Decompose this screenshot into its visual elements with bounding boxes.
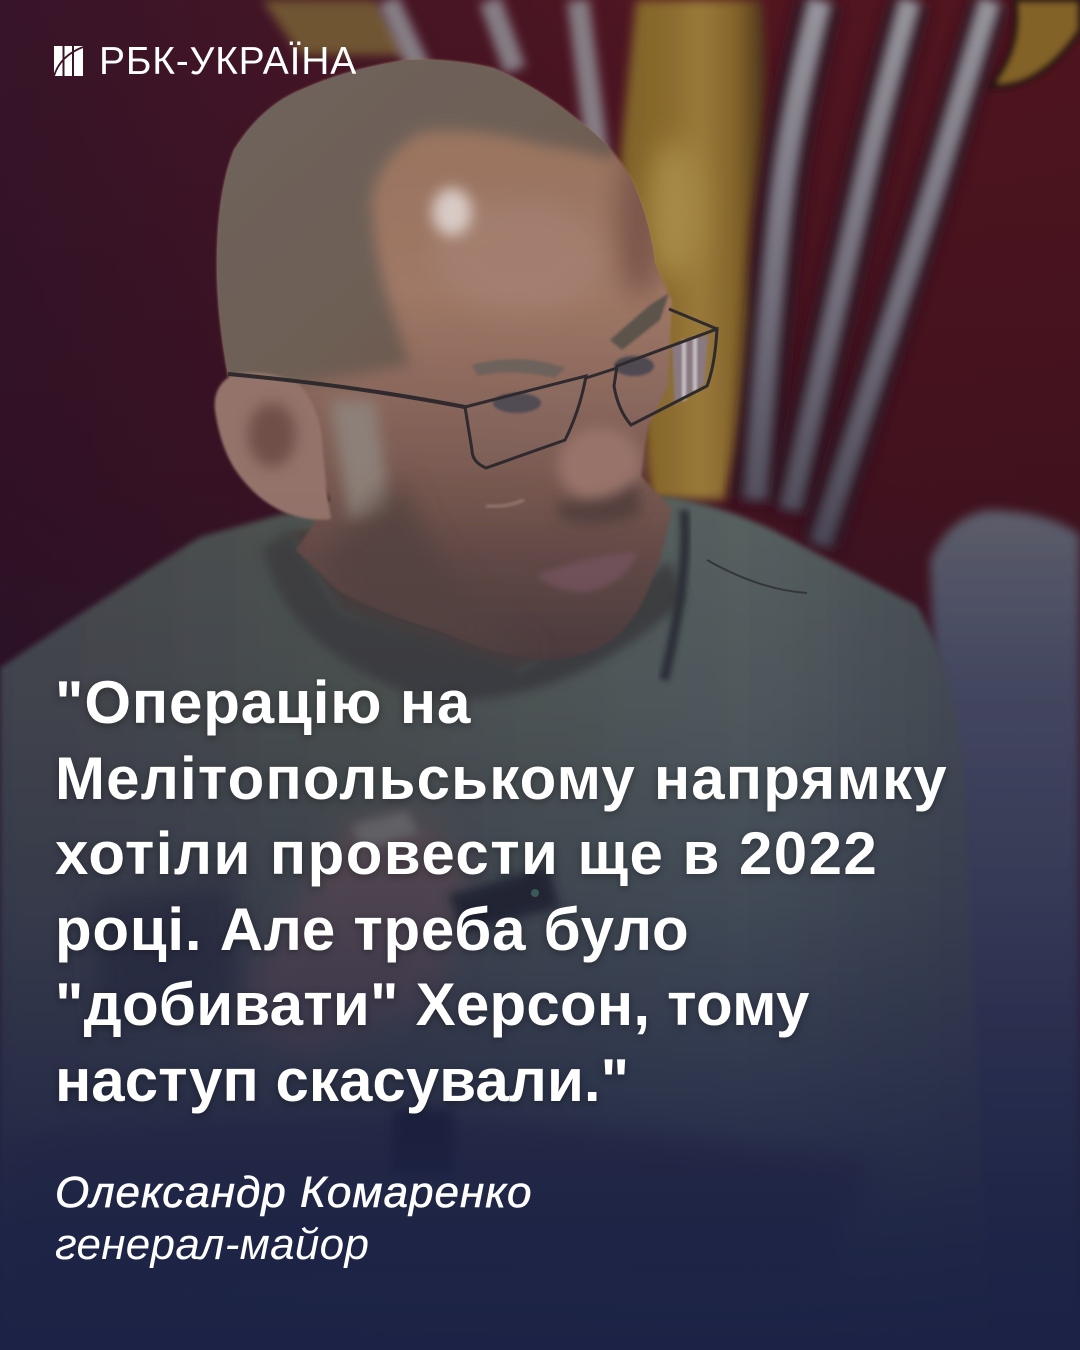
shirt and shoulders bbox=[0, 497, 990, 1350]
quote text: Мелітопольському напрямку bbox=[55, 745, 948, 812]
logo wordmark: РБК-УКРАЇНА bbox=[99, 40, 357, 83]
speaker name: Олександр Комаренко bbox=[55, 1168, 532, 1217]
quote text bbox=[55, 669, 948, 1116]
logo bbox=[54, 40, 357, 83]
head bbox=[213, 58, 673, 660]
quote text: наступ скасували." bbox=[55, 1047, 629, 1114]
logo mark bbox=[54, 46, 83, 76]
speaker role: генерал-майор bbox=[55, 1220, 369, 1269]
quote text: "добивати" Херсон, тому bbox=[55, 971, 810, 1038]
glasses bbox=[228, 309, 717, 468]
quote text: "Операцію на bbox=[55, 669, 471, 736]
quote text: хотіли провести ще в 2022 bbox=[55, 820, 878, 887]
quote text: році. Але треба було bbox=[55, 896, 689, 963]
